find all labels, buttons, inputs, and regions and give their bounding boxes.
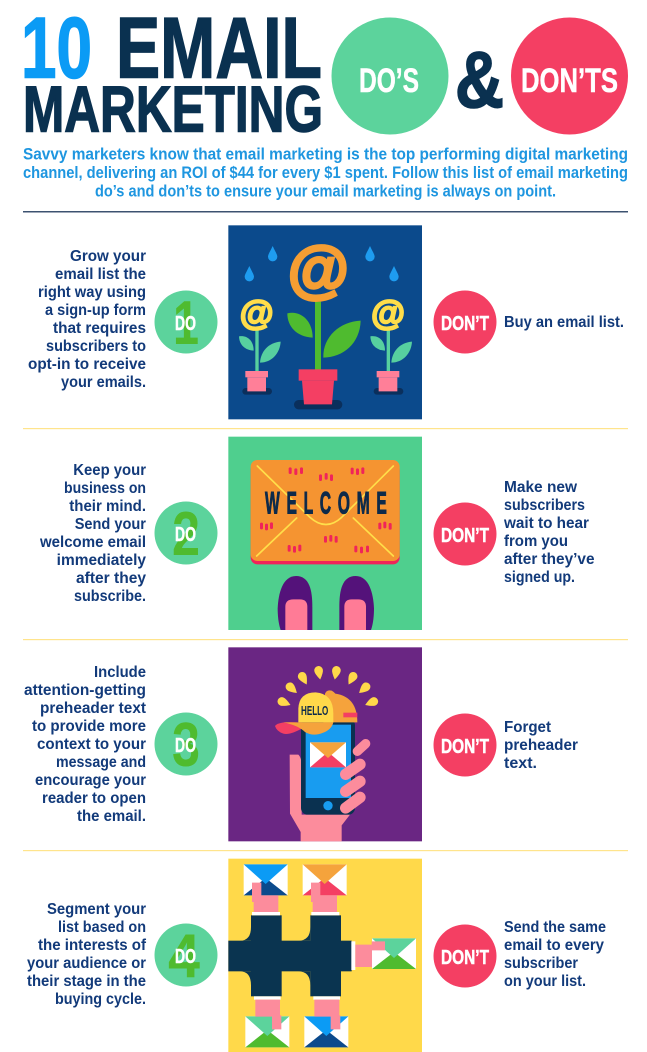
title: 10 xyxy=(21,0,92,96)
don't text 2: signed up. xyxy=(504,569,575,586)
do text 4: buying cycle. xyxy=(55,991,146,1008)
title xyxy=(21,0,323,146)
do text 1: subscribers to xyxy=(46,338,146,355)
do text 4: their stage in the xyxy=(27,973,146,990)
don't text 3: preheader xyxy=(504,737,578,754)
do badge 4: 4 xyxy=(168,922,200,991)
don't text 4: subscriber xyxy=(504,955,578,972)
small plant right xyxy=(370,295,412,395)
do text 3: Include xyxy=(94,664,146,681)
don't text 2: after they’ve xyxy=(504,551,595,568)
do text 2: business on xyxy=(64,480,146,497)
do badge 4: DO xyxy=(175,946,196,968)
illustration: welcome mat xyxy=(228,437,422,630)
fingers xyxy=(346,744,366,808)
title: EMAIL xyxy=(116,0,322,96)
don't badge 3: DON’T xyxy=(441,736,489,758)
do text 4: Segment your xyxy=(47,901,146,918)
rays xyxy=(276,665,379,709)
do text 4: your audience or xyxy=(27,955,146,972)
don't text 4 xyxy=(504,919,606,990)
do text 2: immediately xyxy=(57,552,146,569)
don't text 3: text. xyxy=(504,755,537,772)
do text 3: context to your xyxy=(37,736,146,753)
do text 3 xyxy=(24,664,146,825)
do badge 1: DO xyxy=(175,313,196,335)
do text 2: Send your xyxy=(75,516,146,533)
do text 1: email list the xyxy=(55,266,146,283)
do text 4: the interests of xyxy=(38,937,147,954)
do text 1: Grow your xyxy=(70,248,146,265)
don't text 3 xyxy=(504,719,578,772)
hand back xyxy=(290,755,350,841)
don't text 4: email to every xyxy=(504,937,604,954)
don't text 2: wait to hear xyxy=(503,515,589,532)
do text 4: list based on xyxy=(58,919,146,936)
don't badge 2: DON’T xyxy=(441,525,489,547)
don't badge 3 xyxy=(434,714,496,776)
intro text: do’s and don’ts to ensure your email marketing is always on point. xyxy=(95,182,556,200)
do text 3: encourage your xyxy=(35,772,146,789)
ampersand: & xyxy=(455,35,504,124)
small plant left: @ xyxy=(240,295,274,333)
doormat: WELCOME xyxy=(265,487,393,521)
large plant: @ xyxy=(288,235,349,305)
badge: don'ts: DON’TS xyxy=(521,62,618,100)
don't text 3: Forget xyxy=(504,719,551,736)
don't text 2 xyxy=(503,479,595,586)
don't badge 1: DON’T xyxy=(441,313,489,335)
do text 1: your emails. xyxy=(61,374,146,391)
do badge 1 xyxy=(154,289,218,358)
cap xyxy=(275,690,357,735)
don't badge 1 xyxy=(434,290,496,354)
do text 2: subscribe. xyxy=(74,588,146,605)
do text 3: to provide more xyxy=(32,718,146,735)
do text 2: their mind. xyxy=(69,498,146,515)
do text 1 xyxy=(28,248,146,391)
jacket arms xyxy=(228,915,352,996)
do badge 2 xyxy=(154,500,218,569)
badge: don'ts xyxy=(511,18,628,134)
do text 3: reader to open xyxy=(42,790,146,807)
doormat xyxy=(251,460,400,564)
hands and cuffs xyxy=(252,883,385,1029)
do text 2: after they xyxy=(76,570,146,587)
do badge 3: DO xyxy=(175,735,196,757)
do badge 2: DO xyxy=(175,524,196,546)
do text 3: message and xyxy=(56,754,146,771)
phone xyxy=(301,719,355,815)
cap: HELLO xyxy=(301,703,328,718)
illustration: segmented sending hands xyxy=(228,859,422,1052)
illustration: phone with hat xyxy=(228,647,422,841)
do text 1: opt-in to receive xyxy=(28,356,146,373)
don't badge 4 xyxy=(434,924,496,988)
badge: do's xyxy=(332,18,448,134)
do text 2: welcome email xyxy=(39,534,146,551)
do badge 4 xyxy=(154,922,218,991)
don't text 4: Send the same xyxy=(504,919,606,936)
don't text 2: from you xyxy=(504,533,568,550)
do text 1: right way using xyxy=(38,284,146,301)
do text 1: that requires xyxy=(53,320,146,337)
don't text 2: Make new xyxy=(504,479,577,496)
small plant left xyxy=(239,295,281,395)
small plant right: @ xyxy=(371,295,405,333)
do badge 3: 3 xyxy=(172,711,200,780)
do badge 1: 1 xyxy=(173,289,199,358)
do text 4 xyxy=(27,901,147,1008)
illustration: email plants xyxy=(228,225,422,419)
water drops xyxy=(245,246,399,281)
don't text 2: subscribers xyxy=(504,497,585,514)
do text 3: preheader text xyxy=(40,700,146,717)
do text 3: attention-getting xyxy=(24,682,146,699)
shoes xyxy=(278,576,374,630)
don't text 1: Buy an email list. xyxy=(504,314,624,331)
title: MARKETING xyxy=(23,72,323,146)
don't text 4: on your list. xyxy=(504,973,586,990)
don't badge 2 xyxy=(434,502,496,566)
do text 3: the email. xyxy=(77,808,146,825)
envelopes xyxy=(244,864,416,1047)
do text 1: a sign-up form xyxy=(45,302,146,319)
do text 2: Keep your xyxy=(73,462,146,479)
don't badge 4: DON’T xyxy=(441,947,489,969)
intro text xyxy=(23,144,628,200)
do badge 2: 2 xyxy=(172,500,200,569)
large plant xyxy=(287,235,361,409)
badge: do's: DO’S xyxy=(359,62,419,100)
do text 2 xyxy=(39,462,146,605)
do badge 3 xyxy=(154,711,218,780)
